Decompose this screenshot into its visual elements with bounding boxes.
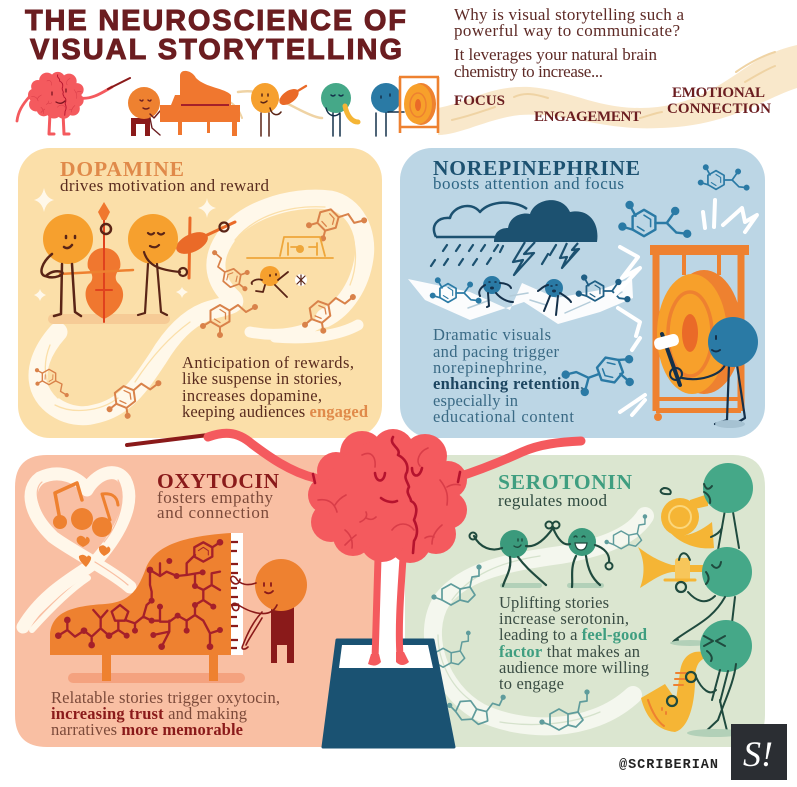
oxytocin body text: increasing trust and making xyxy=(51,704,247,723)
molecule xyxy=(30,362,69,407)
beige ribbon xyxy=(226,45,797,135)
norepinephrine body text: educational content xyxy=(433,407,574,426)
gong xyxy=(657,270,742,394)
dopamine body text: keeping audiences engaged xyxy=(182,402,368,421)
molecule xyxy=(212,242,254,296)
serotonin subheading: regulates mood xyxy=(498,491,608,510)
oxytocin body text xyxy=(51,688,280,739)
norepinephrine body text: enhancing retention, xyxy=(433,374,584,393)
molecule xyxy=(699,165,749,190)
oxytocin subheading: and connection xyxy=(157,503,270,522)
molecule xyxy=(619,202,690,237)
outline cloud xyxy=(434,203,527,237)
molecule xyxy=(426,631,470,667)
molecule xyxy=(201,305,257,337)
gong stand xyxy=(650,245,749,421)
baton xyxy=(127,435,208,445)
football goal and runner xyxy=(247,237,333,297)
molecule xyxy=(540,690,589,730)
gong player xyxy=(653,317,758,428)
cello xyxy=(60,202,133,322)
dopamine body text: Anticipation of rewards, xyxy=(182,353,354,372)
molecule xyxy=(605,515,646,549)
panel: oxytocin xyxy=(15,455,378,747)
white swirl ribbon xyxy=(38,199,365,416)
header section xyxy=(17,5,797,136)
brain face xyxy=(313,468,460,502)
molecule xyxy=(445,676,506,732)
header gong player xyxy=(371,77,439,136)
norepinephrine body text: Dramatic visuals xyxy=(433,325,551,344)
serotonin body text: increase serotonin, xyxy=(499,609,629,628)
left arm xyxy=(208,433,315,478)
podium xyxy=(323,640,454,747)
title xyxy=(25,5,406,66)
intro question: chemistry to increase... xyxy=(454,62,603,81)
running figures xyxy=(479,276,571,315)
right arm xyxy=(458,441,581,477)
dopamine body text: like suspense in stories, xyxy=(182,369,342,388)
molecule xyxy=(432,565,481,605)
norepinephrine body text: especially in xyxy=(433,391,518,410)
dopamine body text xyxy=(182,353,368,421)
norepinephrine subheading: boosts attention and focus xyxy=(433,174,624,193)
oxytocin heading: OXYTOCIN xyxy=(157,469,279,493)
molecule xyxy=(431,278,481,303)
serotonin body text: leading to a feel-good xyxy=(499,625,647,644)
panel: serotonin xyxy=(405,455,765,747)
oxytocin subheading xyxy=(157,488,274,522)
intro question: Why is visual storytelling such a xyxy=(454,5,684,24)
french horn player xyxy=(661,463,753,550)
sparkles xyxy=(34,188,216,301)
rain and lightning xyxy=(431,242,579,275)
benefit: engagement: ENGAGEMENT xyxy=(534,109,641,125)
benefit: focus: FOCUS xyxy=(454,93,505,109)
cellist xyxy=(41,214,111,316)
piano with oxytocin molecule xyxy=(50,533,245,683)
oxytocin body text: narratives more memorable xyxy=(51,720,243,739)
benefit: emotional connection xyxy=(667,85,771,117)
title: VISUAL STORYTELLING xyxy=(30,34,402,66)
molecule xyxy=(562,349,640,406)
white ribbon xyxy=(433,516,645,726)
saxophone player xyxy=(641,620,752,737)
serotonin body text: to engage xyxy=(499,674,564,693)
zigzag ribbon xyxy=(408,278,633,324)
norepinephrine heading: NOREPINEPHRINE xyxy=(433,156,640,180)
intro question xyxy=(454,5,684,81)
logo: S! xyxy=(743,734,773,774)
dopamine subheading: drives motivation and reward xyxy=(60,176,270,195)
credit handle: @SCRIBERIAN xyxy=(619,758,718,773)
violinist xyxy=(128,214,235,315)
intro question: powerful way to communicate? xyxy=(454,21,680,40)
panel: dopamine xyxy=(18,148,382,438)
conductor brain xyxy=(127,429,581,747)
serotonin body text: audience more willing xyxy=(499,658,649,677)
brain xyxy=(308,429,467,563)
dopamine heading: DOPAMINE xyxy=(60,157,184,181)
benefit: emotional connection: EMOTIONAL xyxy=(672,85,765,101)
sound burst lines xyxy=(612,200,757,415)
header saxophonist xyxy=(321,83,358,136)
norepinephrine body text: and pacing trigger xyxy=(433,342,560,361)
pianist xyxy=(231,559,307,663)
header violinist xyxy=(251,83,306,136)
dopamine body text: increases dopamine, xyxy=(182,386,322,405)
ground shadow xyxy=(48,314,170,324)
molecule xyxy=(304,204,367,250)
molecule xyxy=(299,295,360,336)
oxytocin subheading: fosters empathy xyxy=(157,488,274,507)
dancing figures xyxy=(470,522,612,588)
serotonin body text: factor that makes an xyxy=(499,642,640,661)
intro question: It leverages your natural brain xyxy=(454,45,658,64)
heart ribbon xyxy=(23,473,130,630)
header brain conductor xyxy=(17,72,130,134)
storm cloud xyxy=(494,200,597,242)
norepinephrine body text xyxy=(433,325,584,426)
title: THE NEUROSCIENCE OF xyxy=(25,5,406,37)
serotonin heading: SEROTONIN xyxy=(498,470,632,494)
panel: norepinephrine xyxy=(400,148,765,438)
logo xyxy=(731,724,787,780)
benefit: emotional connection: CONNECTION xyxy=(667,101,771,117)
legs xyxy=(368,555,409,666)
norepinephrine body text: norepinephrine, xyxy=(433,358,547,377)
header pianist xyxy=(128,71,240,136)
music notes xyxy=(53,483,118,567)
oxytocin body text: Relatable stories trigger oxytocin, xyxy=(51,688,280,707)
trumpet player xyxy=(638,547,752,646)
serotonin body text: Uplifting stories xyxy=(499,593,609,612)
serotonin body text xyxy=(499,593,649,693)
molecule xyxy=(105,381,165,420)
molecule xyxy=(577,275,630,301)
